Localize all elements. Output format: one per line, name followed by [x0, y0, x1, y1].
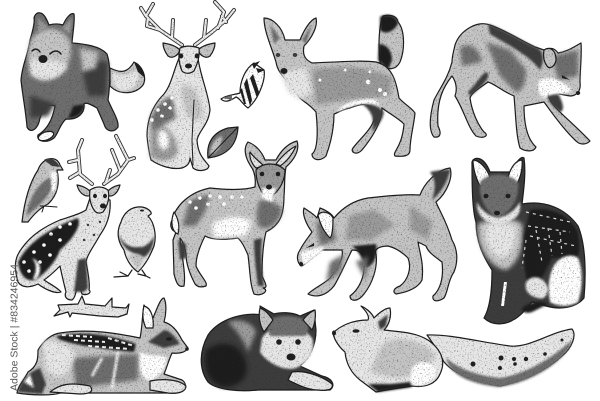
animal: grey fox top left: [21, 13, 145, 142]
animal: long-tailed rodent: [332, 306, 574, 392]
antlers: [69, 136, 134, 184]
animal: small owl-like bird: [114, 207, 155, 278]
animal: dark spotted seated fox right: [472, 157, 585, 324]
animal: seated deer with antlers: [141, 2, 234, 170]
antlers: [141, 2, 234, 45]
watermark: stock id: Adobe Stock | #834246954: [10, 264, 20, 391]
animal: standing spotted deer with antlers: [15, 136, 134, 300]
animal: curled wolf: [201, 306, 333, 391]
animal: fawn with raised dark tail: [264, 15, 415, 160]
animal: perched bird: [22, 158, 63, 222]
animal: small striped bird: [221, 61, 265, 108]
icon: branch: [54, 296, 129, 317]
animal: lying fawn: [17, 298, 189, 395]
animal: walking fox centre: [297, 168, 457, 301]
icon: leaf: [208, 127, 238, 158]
animal: prowling fox top right: [430, 24, 590, 151]
animal: standing spotted doe: [171, 141, 298, 295]
